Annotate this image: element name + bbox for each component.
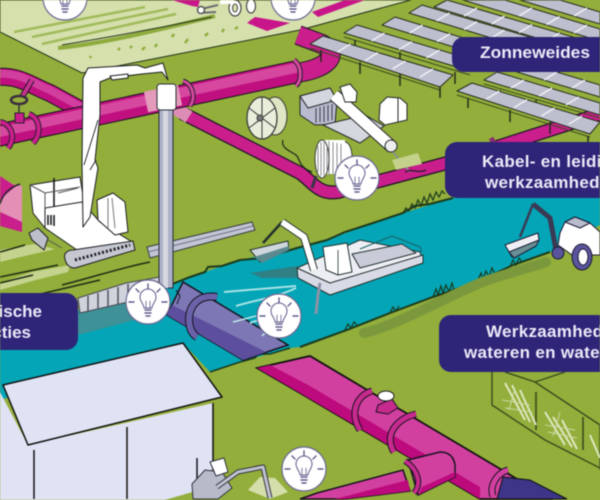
left track marks [0,244,150,300]
label: Werkzaamheden in wateren en waterkeringen [439,315,600,372]
wire fence [492,372,600,470]
water: channel [0,180,600,400]
tractor at the top [197,0,256,16]
water ripples [224,286,296,323]
trench machine [300,84,426,172]
label: Zonneweides [452,37,600,72]
field: light meadow [0,0,411,73]
small excavator bottom [192,458,288,499]
label: Zonneweides: Zonneweides [480,43,590,62]
pink pipe patches at the top [172,0,365,31]
cable drum [247,97,312,172]
grass excavator on the right [505,204,600,270]
pipe: cut section left [0,176,22,232]
post and head [157,84,176,288]
bulb icon: meadow left [43,0,87,20]
bank reed strip [364,262,546,333]
solar panels [310,0,600,146]
bulb icon: sheet piles [126,280,170,324]
bulb icon: cable works [335,156,379,200]
mesh bucket [250,266,297,278]
label: Kabel- en leidingwerkzaamheden [445,142,600,198]
pipe: lower large [257,356,550,499]
pipe open end [492,470,567,499]
pipe: long cable pipe [175,108,600,192]
blue pipe under water [167,282,288,360]
sheet piles [78,277,160,313]
beam [147,222,255,258]
dredging boat [250,222,423,314]
pipe: tee branch [300,452,455,499]
bulb icon: meadow right [271,0,315,20]
bulb icon: bottom [282,447,326,491]
building [0,343,222,500]
label: Civieltechnische constructies [0,293,78,350]
excavator [29,63,168,268]
pipe: upper left [0,74,85,112]
cable spool [315,140,352,178]
bulb icon: channel [257,294,301,338]
valve on main pipe [0,96,39,148]
pipe: main horizontal [0,35,331,136]
